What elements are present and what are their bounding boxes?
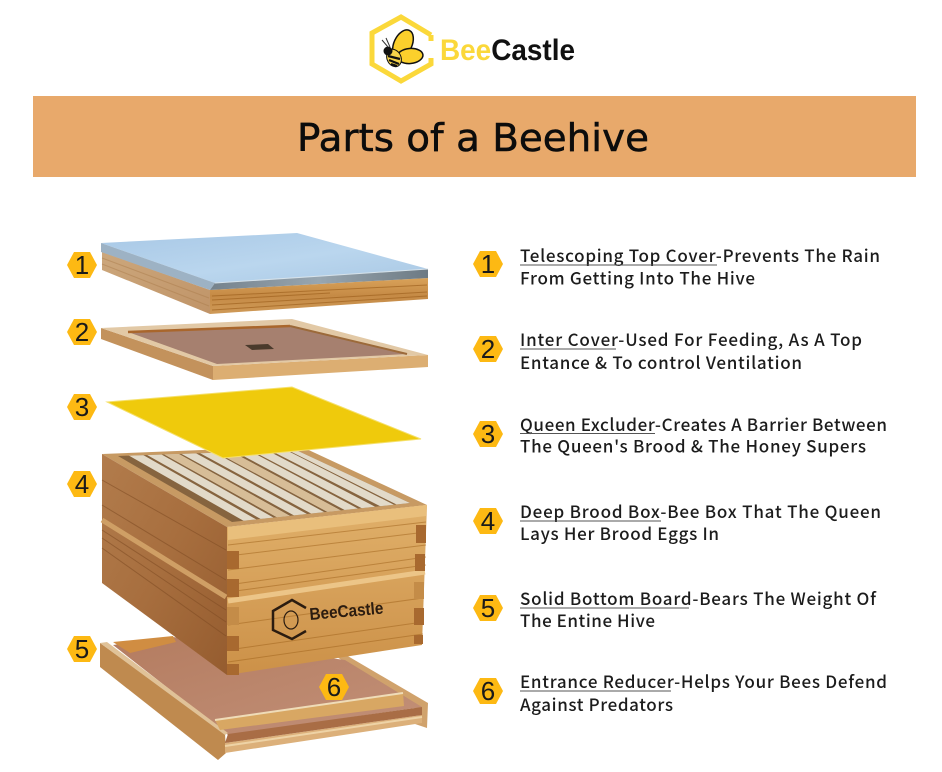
marker 5: 5 <box>75 634 89 664</box>
box logo <box>273 599 384 639</box>
part: telescoping top cover <box>101 233 428 314</box>
item 3 <box>473 411 887 458</box>
item 3: The Queen's Brood & The Honey Supers <box>520 432 866 458</box>
part: queen excluder <box>107 387 421 458</box>
part: deep brood box <box>102 442 427 675</box>
item 3: Queen Excluder-Creates A Barrier Between <box>520 411 887 436</box>
item 1: From Getting Into The Hive <box>520 264 755 290</box>
part: inner cover <box>101 319 428 380</box>
marker 3: 3 <box>75 392 89 422</box>
marker 2: 2 <box>75 317 89 347</box>
marker 4: 4 <box>75 469 89 499</box>
marker 5 <box>67 634 97 664</box>
marker 1 <box>67 250 97 280</box>
item 6: Against Predators <box>520 691 673 716</box>
item 1 <box>473 242 880 290</box>
marker 3 <box>67 392 97 422</box>
marker 6 <box>319 672 349 702</box>
marker 2 <box>67 317 97 347</box>
item 6 <box>473 668 887 716</box>
marker 4 <box>67 469 97 499</box>
item 5: The Entine Hive <box>520 607 655 632</box>
marker 1: 1 <box>75 250 89 280</box>
icon: honeycomb bee emblem <box>372 17 431 81</box>
item 5 <box>473 585 877 632</box>
legend list <box>473 242 887 716</box>
item 2 <box>473 326 862 374</box>
item 2: Entance & To control Ventilation <box>520 349 802 374</box>
illustration: hive parts <box>100 233 428 760</box>
logo: BeeCastle <box>372 17 575 81</box>
title banner <box>33 96 916 177</box>
wordmark: BeeCastle <box>440 34 575 67</box>
item 2: Inter Cover-Used For Feeding, As A Top <box>520 326 862 351</box>
item 1: 1 <box>481 249 495 279</box>
item 5: Solid Bottom Board-Bears The Weight Of <box>520 585 877 610</box>
item 4: Deep Brood Box-Bee Box That The Queen <box>520 498 881 523</box>
item 4: Lays Her Brood Eggs In <box>520 520 719 545</box>
item 1: Telescoping Top Cover-Prevents The Rain <box>520 242 880 267</box>
part: solid bottom board <box>100 636 428 760</box>
marker 6: 6 <box>327 672 341 702</box>
title: Parts of a Beehive <box>297 116 649 160</box>
box logo: BeeCastle <box>309 599 384 624</box>
item 6: 6 <box>481 676 495 706</box>
item 2: 2 <box>481 334 495 364</box>
item 5: 5 <box>481 593 495 623</box>
item 4: 4 <box>481 506 495 536</box>
item 3: 3 <box>481 419 495 449</box>
item 4 <box>473 498 881 545</box>
left number markers <box>67 250 349 702</box>
item 6: Entrance Reducer-Helps Your Bees Defend <box>520 668 887 693</box>
